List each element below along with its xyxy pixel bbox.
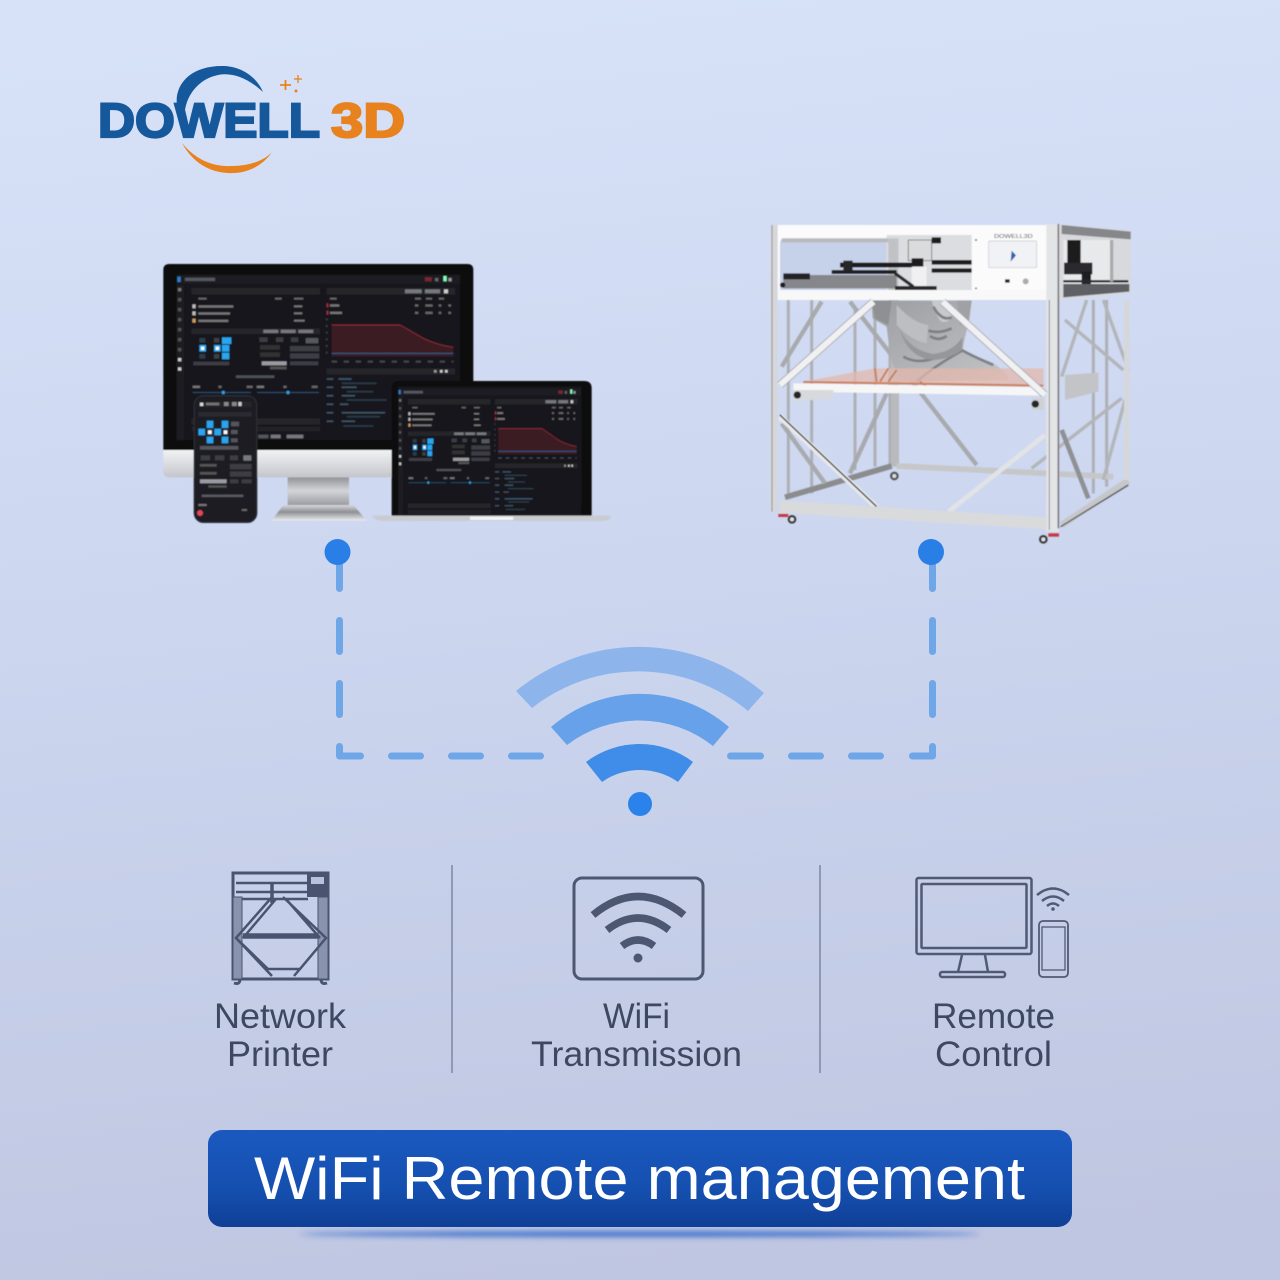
- printed bust on bed: [793, 301, 1098, 410]
- feature: Remote Control: [916, 878, 1069, 1074]
- rear frame and struts: [782, 238, 1128, 497]
- logo: DOWELL 3D: DOWELL: [98, 95, 320, 148]
- label: WiFi Transmission: WiFi: [603, 997, 670, 1036]
- devices group: [163, 264, 612, 522]
- label: Remote Control: Remote: [932, 997, 1055, 1036]
- label: WiFi Transmission: Transmission: [531, 1035, 742, 1074]
- label: WiFi Transmission: [531, 997, 742, 1074]
- label: Remote Control: [932, 997, 1055, 1074]
- icon: printer: [233, 872, 329, 984]
- logo: DOWELL 3D: [98, 66, 405, 173]
- label: Network Printer: Network: [214, 997, 347, 1036]
- smartphone: [194, 396, 257, 522]
- connector: left dashed line: [324, 539, 540, 756]
- icon: monitor, phone and wifi: [916, 878, 1069, 977]
- brand plate: DOWELL3D: [994, 234, 1033, 240]
- desktop monitor: [163, 264, 473, 521]
- banner: WiFi Remote management: [208, 1130, 1072, 1227]
- label: Network Printer: Printer: [227, 1035, 333, 1074]
- logo: DOWELL 3D: 3D: [331, 95, 405, 148]
- banner: WiFi Remote management: WiFi Remote management: [254, 1145, 1025, 1212]
- 3D printer photo: [772, 224, 1131, 544]
- label: Network Printer: [214, 997, 347, 1074]
- casters: [778, 472, 1059, 544]
- top gantry panel: [775, 224, 1131, 300]
- feature: Network Printer: [214, 872, 347, 1074]
- connector: right dashed line: [730, 539, 944, 756]
- laptop: [372, 381, 612, 521]
- icon: wifi tablet: [574, 878, 703, 979]
- feature: WiFi Transmission: [531, 878, 742, 1074]
- banner shadow: [300, 1232, 980, 1236]
- label: Remote Control: Control: [935, 1035, 1052, 1074]
- front frame: [772, 224, 1128, 532]
- divider lines: [452, 865, 820, 1073]
- wifi symbol: [516, 647, 764, 816]
